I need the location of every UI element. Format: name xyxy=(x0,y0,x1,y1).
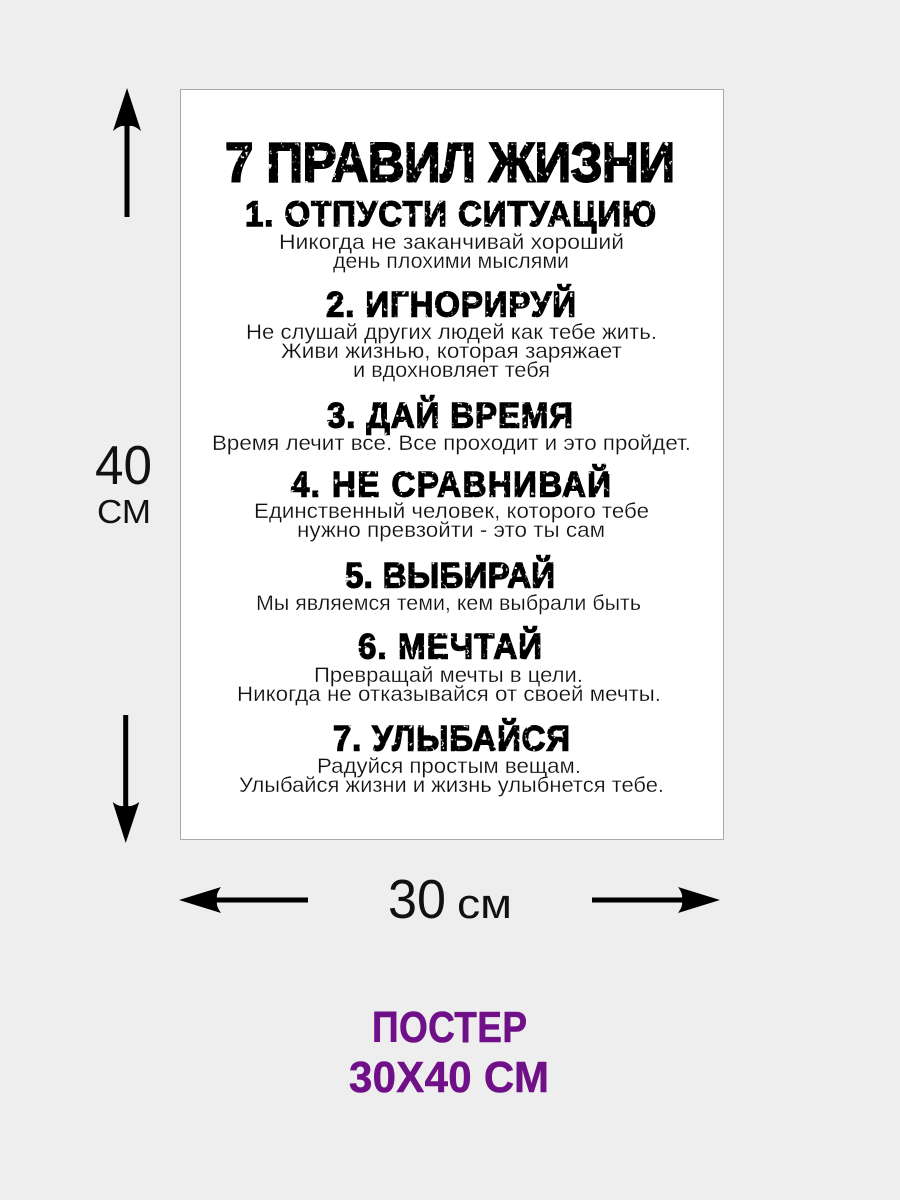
rule 4: 4. НЕ СРАВНИВАЙ xyxy=(291,463,611,505)
rule 3: Время лечит все. Все проходит и это пройдет. xyxy=(212,431,691,455)
rule 2: 2. ИГНОРИРУЙ xyxy=(326,283,576,325)
rule 5: Мы являемся теми, кем выбрали быть xyxy=(256,591,641,615)
product label: ПОСТЕР xyxy=(372,1002,527,1052)
rule 2: Живи жизнью, которая заряжает xyxy=(281,339,622,363)
height label: 40 xyxy=(95,434,152,496)
rule 3 xyxy=(212,394,691,455)
rule 5: 5. ВЫБИРАЙ xyxy=(345,554,555,596)
rule 7: 7. УЛЫБАЙСЯ xyxy=(333,717,570,759)
rule 1: 1. ОТПУСТИ СИТУАЦИЮ xyxy=(245,195,656,234)
rule 1: Никогда не заканчивай хороший xyxy=(279,230,624,254)
rule 6: Никогда не отказывайся от своей мечты. xyxy=(237,682,661,706)
arrow: down xyxy=(113,715,139,843)
rule 7: Радуйся простым вещам. xyxy=(317,754,581,778)
rule 2: и вдохновляет тебя xyxy=(353,358,550,382)
rule 2: Не слушай других людей как тебе жить. xyxy=(246,320,657,344)
rule 3: 3. ДАЙ ВРЕМЯ xyxy=(327,394,573,436)
rule 6: 6. МЕЧТАЙ xyxy=(358,625,542,667)
rule 1 xyxy=(245,195,656,273)
product label: 30X40 СМ xyxy=(349,1053,549,1102)
poster title: 7 ПРАВИЛ ЖИЗНИ xyxy=(225,131,675,194)
arrow: up xyxy=(113,88,141,217)
product label xyxy=(349,1002,549,1102)
rule 6: Превращай мечты в цели. xyxy=(314,663,583,687)
width label xyxy=(388,868,512,930)
rule 7: Улыбайся жизни и жизнь улыбнется тебе. xyxy=(239,773,664,797)
width label: 30 xyxy=(388,868,446,930)
rule 4: нужно превзойти - это ты сам xyxy=(297,518,605,542)
rule 2 xyxy=(246,283,657,382)
height label xyxy=(95,434,152,530)
height label: СМ xyxy=(97,493,151,530)
rule 4 xyxy=(254,463,649,542)
width label: см xyxy=(457,880,512,927)
rule 6 xyxy=(237,625,661,706)
rule 1: день плохими мыслями xyxy=(333,249,569,273)
rule 7 xyxy=(239,717,664,797)
rule 4: Единственный человек, которого тебе xyxy=(254,499,649,523)
arrow: right xyxy=(592,887,720,913)
panel: poster xyxy=(180,90,724,840)
arrow: left xyxy=(179,887,308,913)
rule 5 xyxy=(256,554,641,615)
